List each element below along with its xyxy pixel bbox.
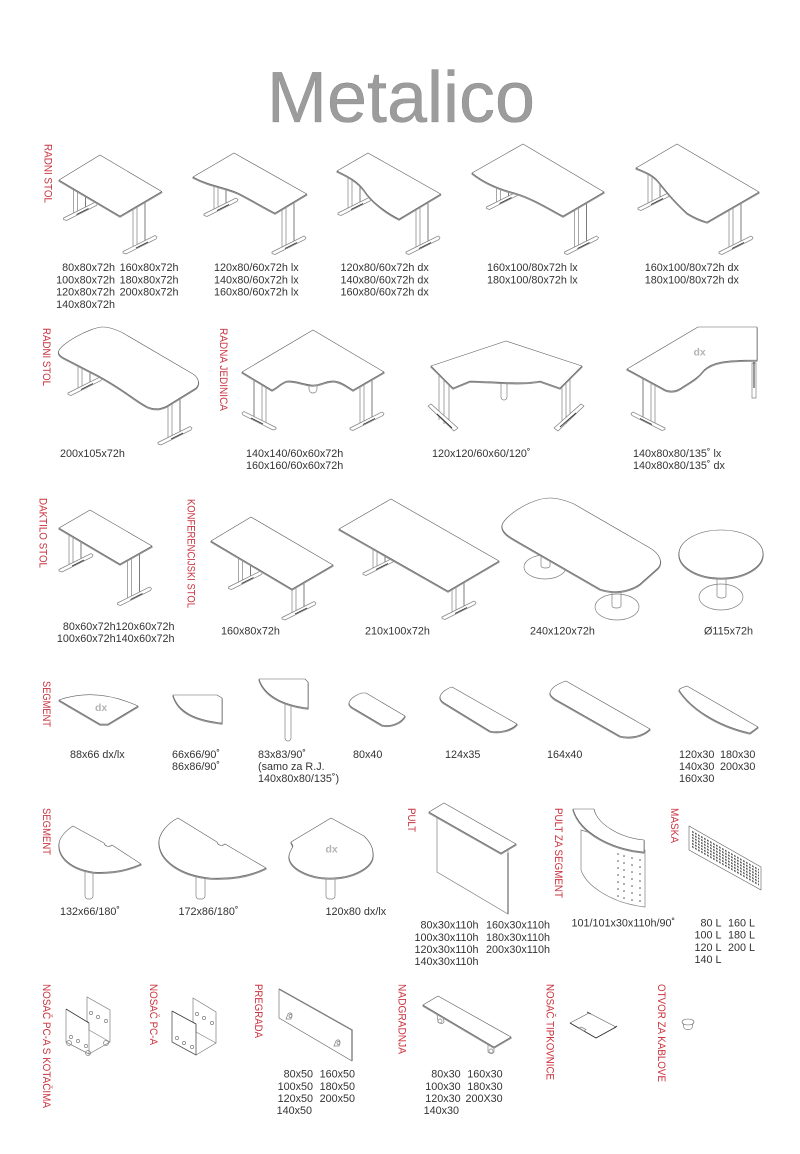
sizes: corner 90	[246, 448, 343, 472]
label: konferencijski stol: KONFERENCIJSKI STOL	[185, 499, 197, 608]
sizes: wave dx wide: 160x100/80x72h dx	[645, 262, 740, 274]
sizes: pult: 120x30x110h	[414, 944, 478, 956]
desk: corner 135	[627, 327, 757, 430]
label: radni stol: RADNI STOL	[40, 328, 52, 386]
sizes: rectangular desk: 120x80x72h	[56, 287, 115, 299]
label: segment: SEGMENT	[40, 808, 52, 855]
sizes: conference 160: 160x80x72h	[221, 626, 280, 638]
sizes: wave lx wide	[487, 262, 578, 286]
label: otvor za kablove: OTVOR ZA KABLOVE	[655, 984, 667, 1082]
sizes: rectangular desk: 80x80x72h	[62, 262, 115, 274]
label: nosac tipkovnice: NOSAČ TIPKOVNICE	[544, 984, 557, 1080]
round table	[679, 530, 763, 610]
conference table: 240 oval	[502, 498, 660, 620]
sizes: curved 120: 200x30	[720, 761, 755, 773]
desk: wave lx narrow	[193, 153, 307, 254]
desk: corner 120	[428, 341, 584, 431]
sizes: round table: Ø115x72h	[704, 626, 753, 638]
sizes: wave dx wide: 180x100/80x72h dx	[645, 274, 740, 286]
panel: radni stol row 1	[42, 144, 759, 311]
sizes: 83x83: 140x80x80/135˚)	[258, 773, 339, 785]
sizes: 132x66: 132x66/180˚	[60, 906, 120, 918]
sizes: pregrada: 160x50	[320, 1068, 355, 1080]
sizes: 124x35: 124x35	[445, 749, 480, 761]
segment: 164x40	[550, 681, 650, 738]
sizes: pregrada: 180x50	[320, 1081, 355, 1093]
label: pregrada: PREGRADA	[252, 984, 264, 1039]
sizes: curved 120: 120x30	[679, 749, 714, 761]
panel: accessories row 6	[40, 984, 694, 1117]
sizes: maska: 140 L	[694, 954, 722, 966]
panel: radni stol and radna jedinica row 2	[40, 327, 757, 472]
desk: typing table	[59, 510, 152, 606]
sizes: wave dx narrow: 120x80/60x72h dx	[340, 262, 429, 274]
counter: pult	[429, 803, 516, 914]
sizes: pregrada: 200x50	[320, 1093, 355, 1105]
segment: 83x83 with leg	[259, 679, 308, 741]
sizes: wave dx wide	[645, 262, 740, 286]
sizes: maska: 100 L	[694, 930, 722, 942]
sizes: nadgradnja: 160x30	[467, 1068, 503, 1080]
sizes: nadgradnja: 180x30	[467, 1081, 503, 1093]
sizes: 66x66: 66x66/90˚	[172, 749, 220, 761]
panel: segment, pult, maska row 5	[40, 803, 761, 968]
desk: wave lx wide	[472, 144, 604, 254]
desk: corner 135: dx	[694, 346, 706, 358]
sizes: wave dx narrow: 160x80/60x72h dx	[340, 287, 429, 299]
sizes: pregrada: 100x50	[278, 1081, 313, 1093]
sizes: wave lx wide: 160x100/80x72h lx	[487, 262, 578, 274]
sizes: pult za segment: 101/101x30x110h/90˚	[572, 918, 675, 930]
segment: 80x40	[349, 693, 405, 726]
pc holder	[172, 998, 216, 1055]
keyboard holder	[570, 1012, 617, 1038]
desk: wave dx narrow	[337, 153, 441, 254]
sizes: nadgradnja: 120x30	[425, 1093, 461, 1105]
segment: 120x80 drop: dx	[326, 844, 338, 856]
sizes: pult	[414, 920, 550, 968]
sizes: rectangular desk: 180x80x72h	[120, 274, 178, 286]
sizes: curved 120: 140x30	[679, 761, 714, 773]
sizes: corner 90: 160x160/60x60x72h	[246, 460, 343, 472]
sizes: corner 135	[633, 448, 725, 472]
label: pult za segment: PULT ZA SEGMENT	[552, 808, 564, 898]
sizes: corner 135: 140x80x80/135˚ dx	[633, 460, 725, 472]
sizes: wave dx narrow	[340, 262, 429, 299]
sizes: conference 240: 240x120x72h	[530, 626, 595, 638]
sizes: rectangular desk: 100x80x72h	[56, 274, 115, 286]
sizes: pult: 160x30x110h	[486, 920, 550, 932]
sizes: 66x66	[172, 749, 220, 773]
sizes: rectangular desk: 160x80x72h	[120, 262, 178, 274]
divider panel	[279, 989, 352, 1061]
desk: rectangular	[59, 155, 162, 254]
label: pult: PULT	[405, 808, 417, 832]
pc holder with wheels	[66, 997, 110, 1056]
sizes: 83x83	[258, 749, 339, 785]
label: radna jedinica: RADNA JEDINICA	[217, 328, 229, 412]
sizes: typing table: 80x60x72h120x60x72h	[63, 621, 174, 633]
sizes: maska: 180 L	[728, 930, 755, 942]
conference table: 160	[211, 517, 333, 620]
shelf: nadgradnja	[423, 996, 511, 1054]
sizes: nadgradnja: 200X30	[465, 1093, 503, 1105]
label: daktilo stol: DAKTILO STOL	[36, 498, 48, 568]
counter: pult za segment	[573, 809, 645, 907]
sizes: pult: 200x30x110h	[486, 944, 550, 956]
sizes: maska: 200 L	[728, 942, 755, 954]
sizes: rectangular desk: 140x80x72h	[56, 299, 115, 311]
sizes: nadgradnja: 100x30	[425, 1081, 461, 1093]
sizes: typing table: 100x60x72h140x60x72h	[57, 633, 174, 645]
icon: cable grommet	[682, 1019, 694, 1030]
sizes: nadgradnja: 80x30	[431, 1068, 461, 1080]
label: nosac pc-a: NOSAČ PC-A	[147, 984, 160, 1046]
segment: 120x80 drop	[289, 818, 373, 899]
sizes: corner 90: 140x140/60x60x72h	[246, 448, 343, 460]
sizes: bow front: 200x105x72h	[60, 448, 125, 460]
segment: 66x66	[173, 695, 222, 724]
desk: corner 90	[242, 330, 384, 430]
sizes: pregrada: 120x50	[278, 1093, 313, 1105]
sizes: rectangular desk: 200x80x72h	[120, 287, 178, 299]
label: maska: MASKA	[668, 808, 680, 844]
sizes: wave dx narrow: 140x80/60x72h dx	[340, 274, 429, 286]
panel: segment row 4	[40, 679, 758, 785]
sizes: curved 120: 160x30	[679, 773, 714, 785]
sizes: maska: 80 L	[700, 918, 722, 930]
segment: 88x66: dx	[95, 702, 107, 714]
sizes: conference 210: 210x100x72h	[365, 626, 430, 638]
sizes: rectangular desk	[56, 262, 178, 311]
sizes: maska: 160 L	[728, 918, 755, 930]
segment: 172x86 half round	[159, 818, 266, 899]
sizes: pult: 100x30x110h	[414, 932, 478, 944]
sizes: 88x66: 88x66 dx/lx	[70, 749, 125, 761]
sizes: wave lx narrow: 160x80/60x72h lx	[214, 287, 299, 299]
panel: daktilo and konferencijski stol row 3	[36, 498, 763, 645]
sizes: pregrada	[277, 1068, 355, 1117]
sizes: maska	[694, 918, 755, 966]
sizes: pregrada: 80x50	[284, 1068, 313, 1080]
sizes: 83x83: (samo za R.J.	[258, 761, 325, 773]
sizes: wave lx narrow: 120x80/60x72h lx	[214, 262, 299, 274]
label: radni stol: RADNI STOL	[42, 144, 54, 203]
screen: maska	[689, 826, 761, 890]
sizes: nadgradnja: 140x30	[424, 1105, 459, 1117]
label: segment: SEGMENT	[40, 681, 52, 727]
sizes: 83x83: 83x83/90˚	[258, 749, 306, 761]
sizes: nadgradnja	[424, 1068, 503, 1117]
sizes: typing table	[57, 621, 174, 645]
sizes: 164x40: 164x40	[547, 749, 582, 761]
sizes: wave lx wide: 180x100/80x72h lx	[487, 274, 578, 286]
sizes: 120x80: 120x80 dx/lx	[326, 906, 387, 918]
sizes: wave lx narrow: 140x80/60x72h lx	[214, 274, 299, 286]
sizes: curved 120: 180x30	[720, 749, 755, 761]
label: nosac pc-a s kotacima: NOSAČ PC-A S KOTAČIMA	[40, 984, 53, 1109]
segment: 88x66	[59, 695, 138, 725]
segment: 132x66 half round	[59, 826, 141, 899]
sizes: 80x40: 80x40	[353, 749, 382, 761]
sizes: pult: 80x30x110h	[420, 920, 478, 932]
sizes: 172x86: 172x86/180˚	[178, 906, 239, 918]
desk: wave dx wide	[636, 144, 759, 254]
sizes: corner 135: 140x80x80/135˚ lx	[633, 448, 722, 460]
conference table: 210	[339, 499, 499, 620]
sizes: maska: 120 L	[694, 942, 722, 954]
segment: 124x35	[440, 687, 517, 733]
sizes: pregrada: 140x50	[277, 1105, 312, 1117]
sizes: pult: 140x30x110h	[414, 956, 478, 968]
sizes: curved 120	[679, 749, 755, 785]
segment: curved 120	[679, 686, 758, 734]
sizes: wave lx narrow	[214, 262, 299, 299]
sizes: pult: 180x30x110h	[486, 932, 550, 944]
sizes: 66x66: 86x86/90˚	[172, 761, 220, 773]
sizes: corner 120: 120x120/60x60/120˚	[432, 448, 530, 460]
label: nadgradnja: NADGRADNJA	[396, 984, 408, 1055]
desk: bow front	[58, 327, 198, 445]
title: Metalico	[267, 58, 535, 138]
